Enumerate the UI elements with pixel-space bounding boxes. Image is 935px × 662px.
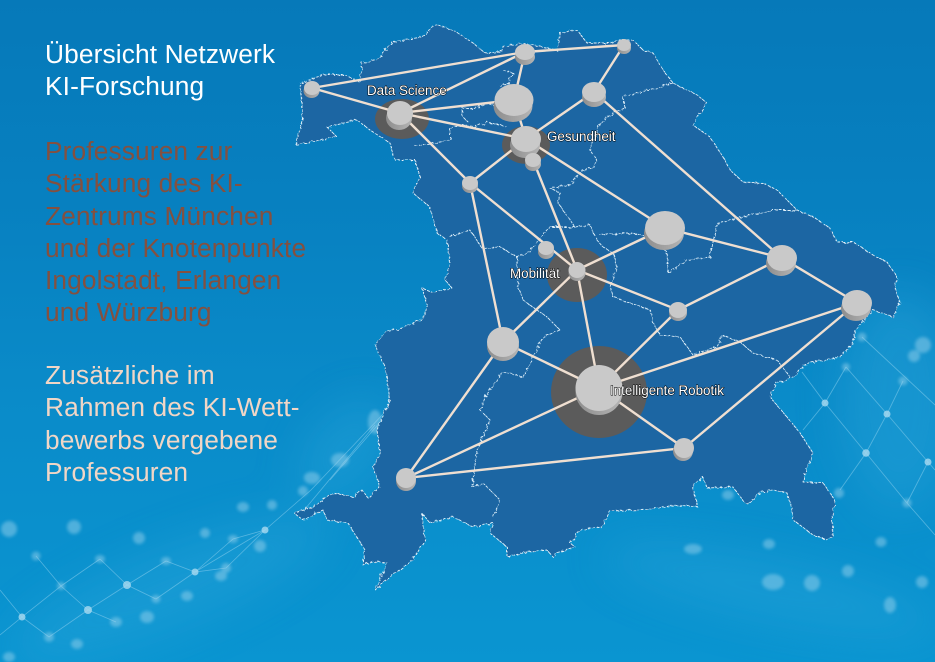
dark focus circle: Gesundheit — [502, 126, 550, 164]
legend text: professorships for the KI centre and nodes: Zentrums München — [45, 201, 273, 231]
legend text: professorships for the KI centre and nodes: und Würzburg — [45, 297, 212, 327]
label: Data Science: Data Science — [367, 83, 447, 98]
legend text: professorships for the KI centre and nodes: Professuren zur — [45, 136, 232, 166]
dark focus circle: Data Science — [375, 99, 429, 139]
legend text: additional professorships — [45, 360, 300, 487]
legend text: additional professorships: Rahmen des KI-Wett- — [45, 392, 300, 422]
legend text: additional professorships: bewerbs vergebene — [45, 425, 278, 455]
map of Bavaria — [294, 24, 900, 590]
network nodes — [304, 39, 872, 491]
dark focus circle: Mobilität — [547, 248, 607, 302]
label: Gesundheit: Gesundheit — [547, 129, 616, 144]
legend text: professorships for the KI centre and nodes: Ingolstadt, Erlangen — [45, 265, 281, 295]
title: KI-Forschung — [45, 71, 204, 101]
dark focus circle: Intelligente Robotik — [551, 346, 647, 438]
background network lower right — [684, 332, 935, 613]
network connections — [312, 45, 857, 478]
background glow — [0, 290, 935, 662]
legend text: professorships for the KI centre and nodes: Stärkung des KI- — [45, 168, 243, 198]
title — [45, 39, 275, 101]
label: Intelligente Robotik: Intelligente Robotik — [610, 383, 724, 398]
legend text: professorships for the KI centre and nodes: und der Knotenpunkte — [45, 233, 306, 263]
legend text: additional professorships: Zusätzliche im — [45, 360, 215, 390]
label: Mobilität: Mobilität — [510, 266, 560, 281]
background network lower left — [0, 410, 385, 662]
legend text: additional professorships: Professuren — [45, 457, 188, 487]
legend text: professorships for the KI centre and nodes — [45, 136, 306, 327]
title: Übersicht Netzwerk — [45, 39, 275, 69]
